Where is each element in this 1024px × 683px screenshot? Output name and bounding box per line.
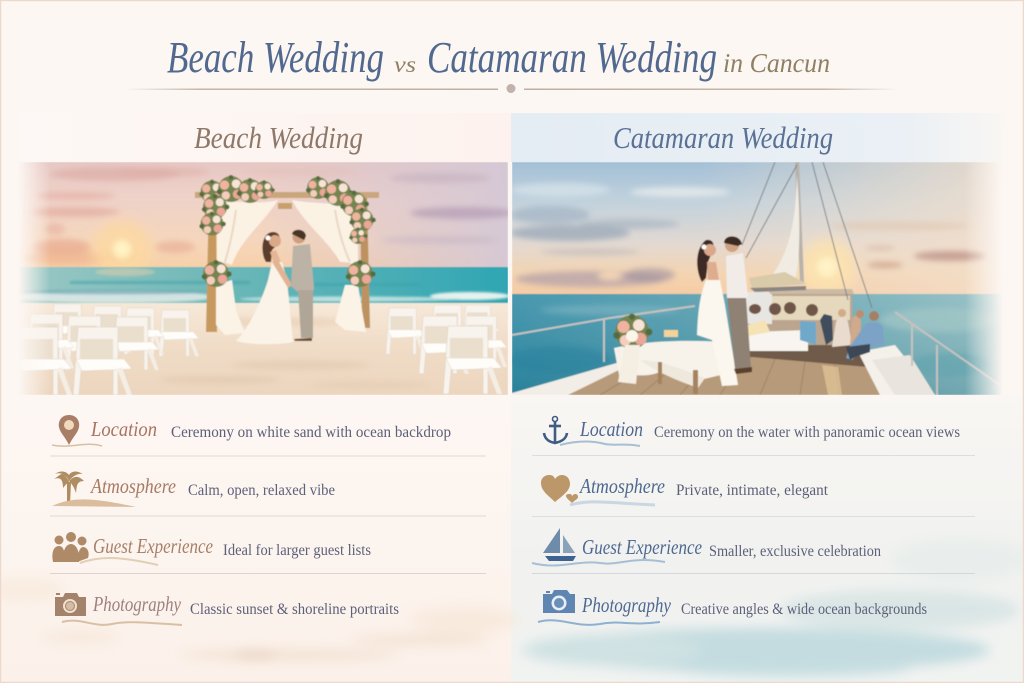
row: guest experience: Guest Experience [582,535,702,559]
row: location [52,415,451,446]
icon: palm tree [52,471,136,507]
comparison rows: catamaran [532,416,975,625]
row: photography: Creative angles & wide ocean backgrounds [681,601,927,618]
title [167,33,830,82]
icon: hearts [541,475,578,503]
title: in Cancun [723,48,830,78]
title: Beach Wedding [167,33,384,82]
row: atmosphere: Calm, open, relaxed vibe [188,482,335,499]
row: location: Location [579,417,643,441]
row: photography: Classic sunset & shoreline portraits [190,601,399,618]
row: guest experience: Smaller, exclusive celebration [709,543,881,560]
row: atmosphere: Private, intimate, elegant [676,482,829,499]
title: vs [394,52,416,77]
row: guest experience [52,532,371,565]
row: atmosphere [541,474,829,505]
row: location: Ceremony on white sand with ocean backdrop [171,424,451,441]
heading band: beach wedding: Beach Wedding [194,120,363,155]
heading band: catamaran wedding: Catamaran Wedding [613,120,833,155]
row: atmosphere: Atmosphere [89,474,176,498]
row: guest experience [532,528,881,566]
title divider [125,84,899,93]
row: atmosphere: Atmosphere [578,474,665,498]
row: location: Ceremony on the water with panoramic ocean views [654,424,960,441]
row: photography: Photography [581,593,672,617]
heading band: catamaran wedding [511,113,1003,162]
icon: camera [543,590,575,613]
photo: catamaran ceremony [510,162,1004,395]
heading band: beach wedding [20,113,511,162]
row: location: Location [90,417,157,441]
icon: anchor [544,416,567,443]
icon: sailboat [543,528,576,561]
row: photography: Photography [92,592,182,616]
photo: beach ceremony [13,162,514,395]
row: photography [55,592,399,625]
row: atmosphere [52,471,335,507]
row: location [544,416,960,446]
title: Catamaran Wedding [427,33,717,82]
icon: map pin [52,415,102,446]
panel: catamaran wedding [510,113,1004,625]
icon: camera [55,593,86,616]
row: guest experience: Ideal for larger guest lists [223,542,371,559]
row: photography [538,590,927,625]
row: guest experience: Guest Experience [93,534,213,558]
comparison rows: beach [50,415,486,625]
panel: beach wedding [13,113,514,625]
icon: guests [52,532,89,562]
